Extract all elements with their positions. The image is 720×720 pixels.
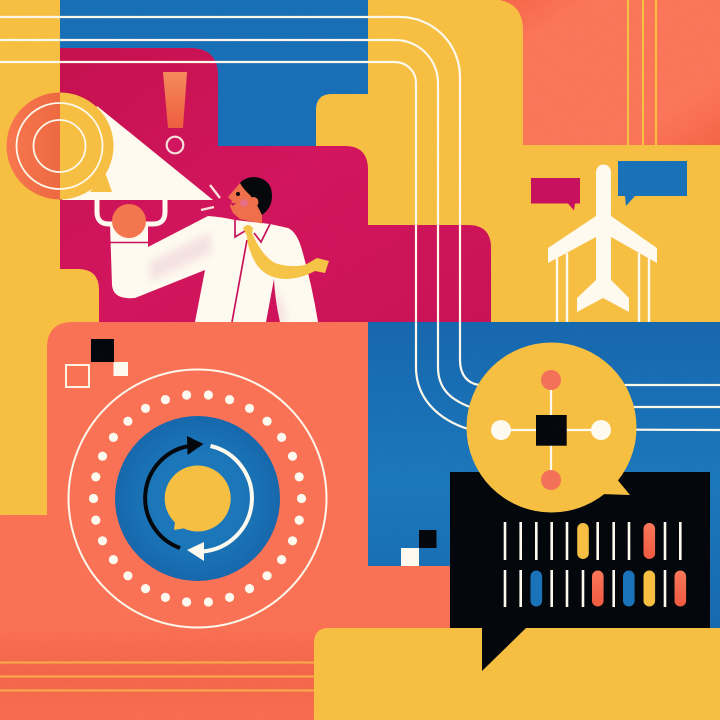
neck and face: [228, 183, 262, 224]
icon: airplane: [548, 164, 657, 322]
icon: exclamation mark: [163, 72, 187, 153]
black squares on blue: [401, 530, 436, 566]
shout marks: [201, 185, 220, 210]
raised arm and shirt: [110, 216, 318, 322]
panel: blue right block: [368, 322, 720, 640]
node top: [541, 370, 561, 390]
squares: top left of coral panel: [66, 339, 128, 387]
icon: yellow speech bubble with node diagram: [466, 342, 636, 512]
panel: coral lower left block: [0, 322, 450, 720]
white route lines: [0, 17, 720, 430]
connectors: [501, 380, 601, 480]
eye: [236, 192, 240, 196]
node right: [591, 420, 611, 440]
collar and placket: [232, 220, 270, 322]
chart: bars and pills row one: [505, 522, 680, 560]
ear: [248, 197, 258, 207]
node left: [491, 420, 511, 440]
panel: black speech bubble: [450, 472, 710, 671]
panel: coral top right: [500, 0, 720, 145]
figure: man with megaphone: [97, 177, 329, 322]
icon: small yellow speech bubble: [165, 466, 231, 532]
icon: speech bubble with target rings: [6, 92, 113, 200]
arrow: black cycle arrow: [145, 436, 204, 548]
cuff line: [110, 242, 148, 244]
chart: bars and pills row two: [505, 570, 686, 607]
icon: crimson speech bubble: [531, 178, 580, 210]
node bottom: [541, 470, 561, 490]
shirt shading: [150, 232, 288, 322]
trails: [557, 253, 649, 322]
panel: crimson stepped block: [60, 48, 491, 325]
stripes: yellow vertical lines on coral: [628, 0, 656, 145]
arrow: white cycle arrow: [187, 446, 252, 561]
megaphone handle: [97, 200, 165, 224]
hand: [112, 204, 146, 238]
mouth: [230, 203, 236, 206]
icon: blue speech bubble: [618, 161, 687, 206]
icon: loudspeaker cone: [62, 106, 213, 200]
ring: outer white circle: [68, 370, 326, 628]
cheek: [240, 199, 248, 207]
center square: [536, 415, 567, 446]
tie: [243, 225, 329, 279]
stripes: orange horizontal lines on coral: [0, 662, 316, 690]
ring: white dots: [89, 390, 306, 607]
disc: blue center: [115, 416, 280, 581]
panel: blue top band: [60, 0, 368, 146]
panel: yellow lower right: [314, 628, 720, 720]
hair: [240, 177, 272, 215]
